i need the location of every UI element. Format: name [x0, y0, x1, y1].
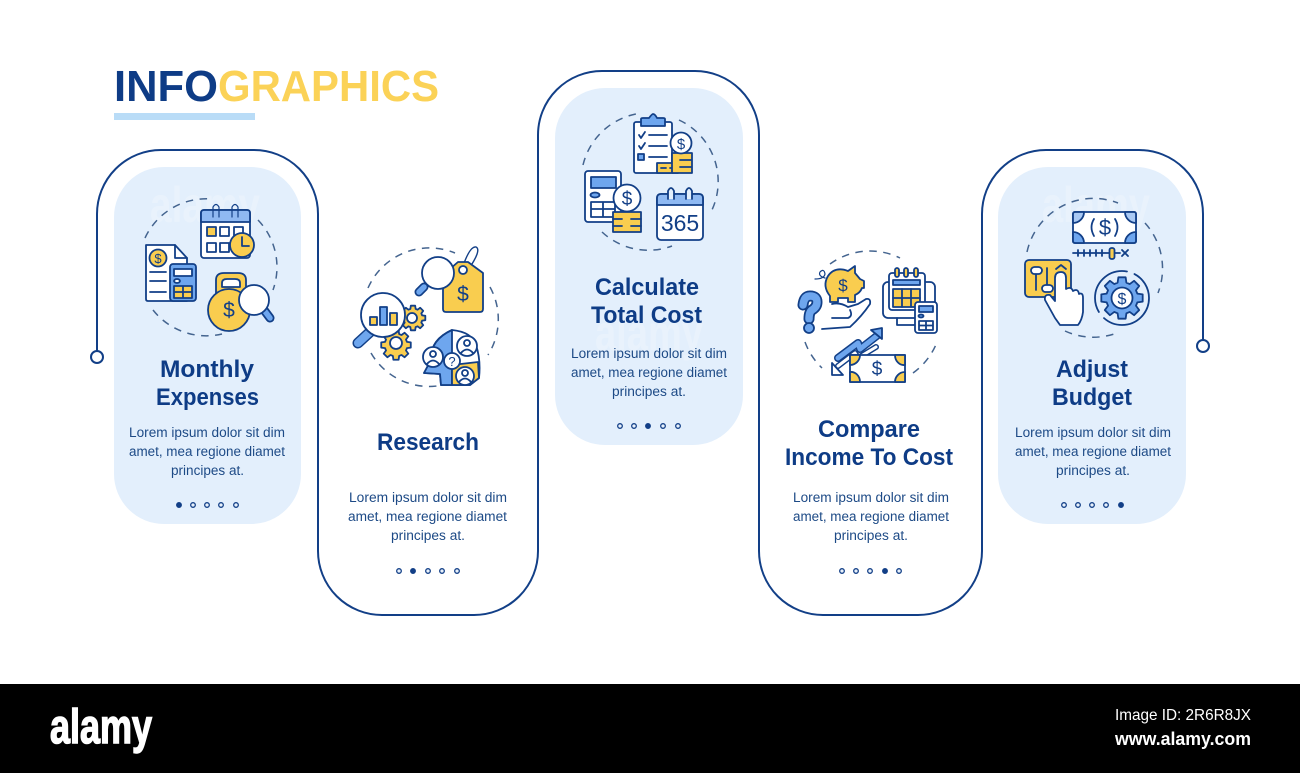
- heading: Expenses: [156, 384, 259, 411]
- body text: principes at.: [612, 384, 686, 399]
- heading: [591, 274, 702, 329]
- icon: adjust budget: [1025, 198, 1163, 337]
- image id: Image ID: 2R6R8JX: [1115, 707, 1251, 724]
- panel: adjust budget: [998, 167, 1186, 524]
- icon: research: $: [457, 283, 469, 306]
- body text: [348, 490, 507, 543]
- panel: calculate total cost: [555, 88, 743, 445]
- body text: principes at.: [391, 528, 465, 543]
- heading: Calculate: [595, 274, 699, 301]
- panel: calculate total cost: alamy: [595, 305, 703, 361]
- body text: Lorem ipsum dolor sit dim: [129, 425, 285, 440]
- pagination dots: [618, 424, 680, 428]
- body text: amet, mea regione diamet: [571, 365, 727, 380]
- body text: amet, mea regione diamet: [793, 509, 949, 524]
- icon: monthly expenses: $: [223, 299, 235, 322]
- panel: monthly expenses: alamy: [150, 177, 260, 233]
- heading: [785, 416, 953, 471]
- title underline: [114, 113, 255, 120]
- title: [114, 62, 439, 111]
- body text: principes at.: [171, 463, 244, 478]
- heading: Adjust: [1056, 356, 1128, 383]
- body text: [1015, 425, 1171, 478]
- icon: monthly expenses: [145, 199, 277, 336]
- pagination dots: [177, 503, 238, 507]
- heading: Total Cost: [591, 302, 702, 329]
- icon: calculate total cost: $: [677, 136, 686, 153]
- body text: Lorem ipsum dolor sit dim: [793, 490, 949, 505]
- body text: principes at.: [1056, 463, 1130, 478]
- icon: compare income to cost: $: [872, 359, 883, 380]
- heading: Research: [377, 429, 479, 456]
- pagination dots: [397, 569, 459, 573]
- body text: [793, 490, 949, 543]
- pagination dots: [1062, 503, 1123, 507]
- icon: research: [358, 247, 498, 386]
- body text: Lorem ipsum dolor sit dim: [349, 490, 507, 505]
- heading: [156, 356, 259, 411]
- icon: calculate total cost: $: [622, 189, 633, 210]
- footer bar: [0, 684, 1300, 773]
- icon: adjust budget: $: [1118, 291, 1127, 308]
- icon: monthly expenses: $: [154, 251, 162, 266]
- body text: amet, mea regione diamet: [348, 509, 507, 524]
- body text: amet, mea regione diamet: [1015, 444, 1171, 459]
- icon: research: ?: [448, 354, 456, 369]
- title: GRAPHICS: [218, 62, 439, 111]
- body text: [571, 346, 727, 399]
- heading: Budget: [1052, 384, 1132, 411]
- body text: principes at.: [834, 528, 908, 543]
- body text: Lorem ipsum dolor sit dim: [1015, 425, 1171, 440]
- footer logo: alamy: [50, 701, 152, 754]
- heading: Monthly: [160, 356, 255, 383]
- heading: Compare: [818, 416, 920, 443]
- outline start node: [91, 351, 103, 363]
- panel: monthly expenses: [114, 167, 301, 524]
- icon: calculate total cost: [583, 114, 718, 250]
- icon: compare income to cost: [803, 251, 937, 382]
- icon: calculate total cost: 365: [661, 210, 699, 236]
- title: INFO: [114, 62, 218, 111]
- heading: [1052, 356, 1132, 411]
- icon: adjust budget: $: [1099, 215, 1111, 240]
- body text: [129, 425, 285, 478]
- connecting outline: [97, 71, 1203, 615]
- panel: compare income to cost: [785, 251, 953, 573]
- pagination dots: [840, 569, 901, 573]
- heading: Income To Cost: [785, 444, 953, 471]
- website: www.alamy.com: [1114, 729, 1251, 749]
- outline end node: [1197, 340, 1209, 352]
- panel: research: [348, 247, 507, 573]
- panel: adjust budget: alamy: [1042, 177, 1150, 233]
- body text: Lorem ipsum dolor sit dim: [571, 346, 727, 361]
- body text: amet, mea regione diamet: [129, 444, 285, 459]
- icon: compare income to cost: $: [838, 276, 848, 295]
